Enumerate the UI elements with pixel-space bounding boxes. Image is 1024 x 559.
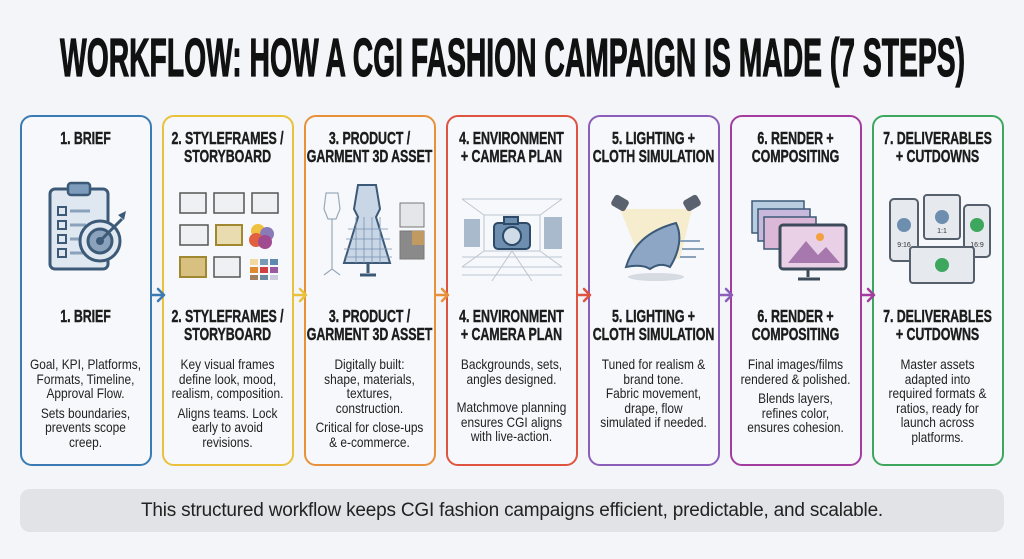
body: brief: Approval Flow. [46, 385, 125, 401]
heading: lighting: 5. LIGHTING + [612, 128, 695, 148]
panel: 7 deliverables [872, 115, 1004, 466]
body: lighting [600, 356, 707, 430]
body: lighting: Tuned for realism & [602, 356, 705, 372]
icon: clipboard target [48, 182, 126, 270]
heading: deliverables 2 [883, 306, 992, 344]
panel: 4 environment [446, 115, 578, 466]
heading: environment [459, 128, 564, 166]
heading: environment 2: 4. ENVIRONMENT [459, 306, 564, 326]
body: deliverables: required formats & [889, 385, 986, 401]
heading: deliverables 2: 7. DELIVERABLES [883, 306, 992, 326]
icon: camera in room [462, 198, 562, 282]
panel: 6 render [730, 115, 862, 466]
body: product: shape, materials, [324, 371, 415, 387]
heading: render 2: 6. RENDER + [757, 306, 834, 326]
body: styleframes: define look, mood, [179, 371, 276, 387]
heading: render [752, 128, 839, 166]
heading: styleframes 2: 2. STYLEFRAMES / [171, 306, 284, 326]
panel: 3 product asset [304, 115, 436, 466]
body: environment: Matchmove planning [457, 399, 566, 415]
footer banner [20, 489, 1004, 532]
heading: product: GARMENT 3D ASSET [307, 146, 432, 166]
heading: environment 2: + CAMERA PLAN [461, 324, 562, 344]
body: render [741, 356, 850, 435]
body: deliverables: launch across [901, 414, 974, 430]
heading: product 2: 3. PRODUCT / [329, 306, 410, 326]
body: lighting: drape, flow [624, 400, 683, 416]
body: product: Digitally built: [334, 356, 405, 372]
body: brief [30, 356, 141, 450]
heading: styleframes: STORYBOARD [184, 146, 271, 166]
heading: render: 6. RENDER + [757, 128, 834, 148]
heading: lighting 2: CLOTH SIMULATION [593, 324, 714, 344]
body: environment: Backgrounds, sets, [461, 356, 562, 372]
heading: lighting 2: 5. LIGHTING + [612, 306, 695, 326]
icon: spotlights cloth [611, 194, 704, 281]
body: brief: Goal, KPI, Platforms, [30, 356, 141, 372]
body: deliverables: adapted into [905, 371, 970, 387]
body: brief: creep. [69, 434, 102, 450]
heading: deliverables [883, 128, 992, 166]
body: brief: Sets boundaries, [41, 405, 130, 421]
heading: lighting: CLOTH SIMULATION [593, 146, 714, 166]
body: environment: angles designed. [467, 371, 556, 387]
body: lighting: simulated if needed. [600, 414, 707, 430]
heading: styleframes: 2. STYLEFRAMES / [171, 128, 284, 148]
body: environment: ensures CGI aligns [461, 414, 562, 430]
icon: device formats: 16:9 [970, 242, 984, 249]
heading: environment 2 [459, 306, 564, 344]
icon: dress form [323, 184, 424, 276]
heading: product 2: GARMENT 3D ASSET [307, 324, 432, 344]
heading: render: COMPOSITING [752, 146, 839, 166]
panel: 5 lighting [588, 115, 720, 466]
icon: device formats: 1:1 [937, 228, 947, 235]
body: deliverables [889, 356, 986, 445]
body: lighting: brand tone. [623, 371, 684, 387]
heading: brief: 1. BRIEF [60, 128, 111, 148]
body: product: construction. [336, 400, 403, 416]
heading: lighting [593, 128, 714, 166]
heading: product: 3. PRODUCT / [329, 128, 410, 148]
heading: brief 2: 1. BRIEF [60, 306, 111, 326]
body: environment: with live-action. [471, 428, 552, 444]
body: styleframes: Aligns teams. Lock [178, 405, 277, 421]
body: render: ensures cohesion. [747, 419, 844, 435]
body: render: Blends layers, [758, 390, 833, 406]
body: styleframes: realism, composition. [172, 385, 283, 401]
heading: deliverables: + CUTDOWNS [896, 146, 979, 166]
heading: lighting 2 [593, 306, 714, 344]
heading: environment: + CAMERA PLAN [461, 146, 562, 166]
body: product: & e-commerce. [329, 434, 410, 450]
body: styleframes: Key visual frames [181, 356, 274, 372]
heading: render 2: COMPOSITING [752, 324, 839, 344]
body: styleframes [172, 356, 283, 450]
body: styleframes: revisions. [202, 434, 253, 450]
footer banner: This structured workflow keeps CGI fashion campaigns efficient, predictable, and scalable. [141, 500, 883, 521]
icon: device formats [889, 194, 991, 284]
arrows between panels [152, 288, 876, 302]
heading: deliverables: 7. DELIVERABLES [883, 128, 992, 148]
icon: storyboard frames [179, 192, 279, 280]
heading: deliverables 2: + CUTDOWNS [896, 324, 979, 344]
body: brief: Formats, Timeline, [37, 371, 134, 387]
body: lighting: Fabric movement, [606, 385, 701, 401]
icon: device formats: 9:16 [897, 242, 911, 249]
heading: styleframes 2: STORYBOARD [184, 324, 271, 344]
body: styleframes: early to avoid [192, 419, 263, 435]
body: environment [457, 356, 566, 444]
panel: 1 brief [20, 115, 152, 466]
heading: styleframes 2 [171, 306, 284, 344]
heading: styleframes [171, 128, 284, 166]
heading: render 2 [752, 306, 839, 344]
heading: product 2 [307, 306, 432, 344]
body: product [316, 356, 423, 450]
heading: environment: 4. ENVIRONMENT [459, 128, 564, 148]
body: deliverables: platforms. [911, 429, 964, 445]
panel: 2 styleframes [162, 115, 294, 466]
body: render: rendered & polished. [741, 371, 850, 387]
body: brief: prevents scope [45, 419, 126, 435]
body: product: textures, [347, 385, 392, 401]
body: render: Final images/films [748, 356, 843, 372]
body: deliverables: ratios, ready for [896, 400, 979, 416]
icon: layered monitor [751, 200, 848, 280]
body: deliverables: Master assets [900, 356, 975, 372]
body: product: Critical for close-ups [316, 419, 423, 435]
body: render: refines color, [762, 405, 829, 421]
heading: product [307, 128, 432, 166]
